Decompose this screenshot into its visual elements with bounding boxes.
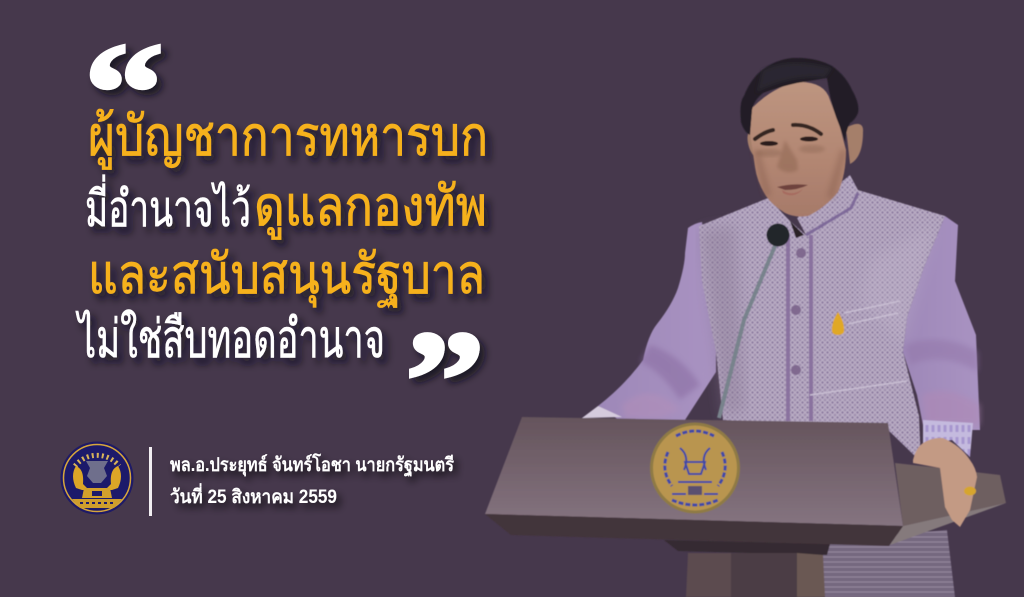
quote line 2: มี่อำนาจไว้	[85, 175, 251, 237]
icon: government seal	[60, 442, 134, 514]
quote line 1: ผู้บัญชาการทหารบก	[88, 105, 488, 170]
divider	[149, 447, 152, 516]
quote block	[75, 14, 488, 458]
pocket	[810, 301, 907, 395]
quote line 3: และสนับสนุนรัฐบาล	[88, 243, 485, 308]
face	[750, 82, 846, 217]
caption	[170, 453, 455, 508]
head	[740, 58, 863, 217]
lectern side	[890, 463, 1006, 545]
microphone	[719, 224, 790, 418]
lectern front	[485, 417, 903, 526]
quote line 2	[85, 175, 487, 240]
photo: speaker at lectern	[485, 58, 1006, 597]
collar	[790, 175, 858, 238]
lectern lower band	[485, 514, 903, 546]
left cuff	[582, 406, 622, 418]
skirt	[823, 530, 955, 597]
lectern seal	[650, 422, 740, 514]
ring	[964, 486, 976, 496]
placket	[786, 235, 813, 421]
quote line 4: ไม่ใช่สืบทอดอำนาจ	[75, 309, 385, 369]
vest	[699, 190, 945, 462]
quote line 2: ดูแลกองทัพ	[254, 175, 487, 240]
right cuff	[923, 420, 973, 457]
icon: closing quote mark: ”	[405, 302, 485, 458]
right sleeve	[903, 216, 980, 430]
badge	[832, 312, 844, 335]
hand	[913, 438, 977, 527]
left sleeve	[598, 222, 716, 420]
lectern column	[664, 540, 830, 597]
hair	[740, 58, 858, 142]
icon: opening quote mark: “	[84, 14, 164, 170]
date: วันที่ 25 สิงหาคม 2559	[170, 483, 337, 508]
ears	[747, 124, 863, 164]
speaker name: พล.อ.ประยุทธ์ จันทร์โอชา นายกรัฐมนตรี	[170, 453, 455, 478]
face features	[755, 125, 844, 198]
